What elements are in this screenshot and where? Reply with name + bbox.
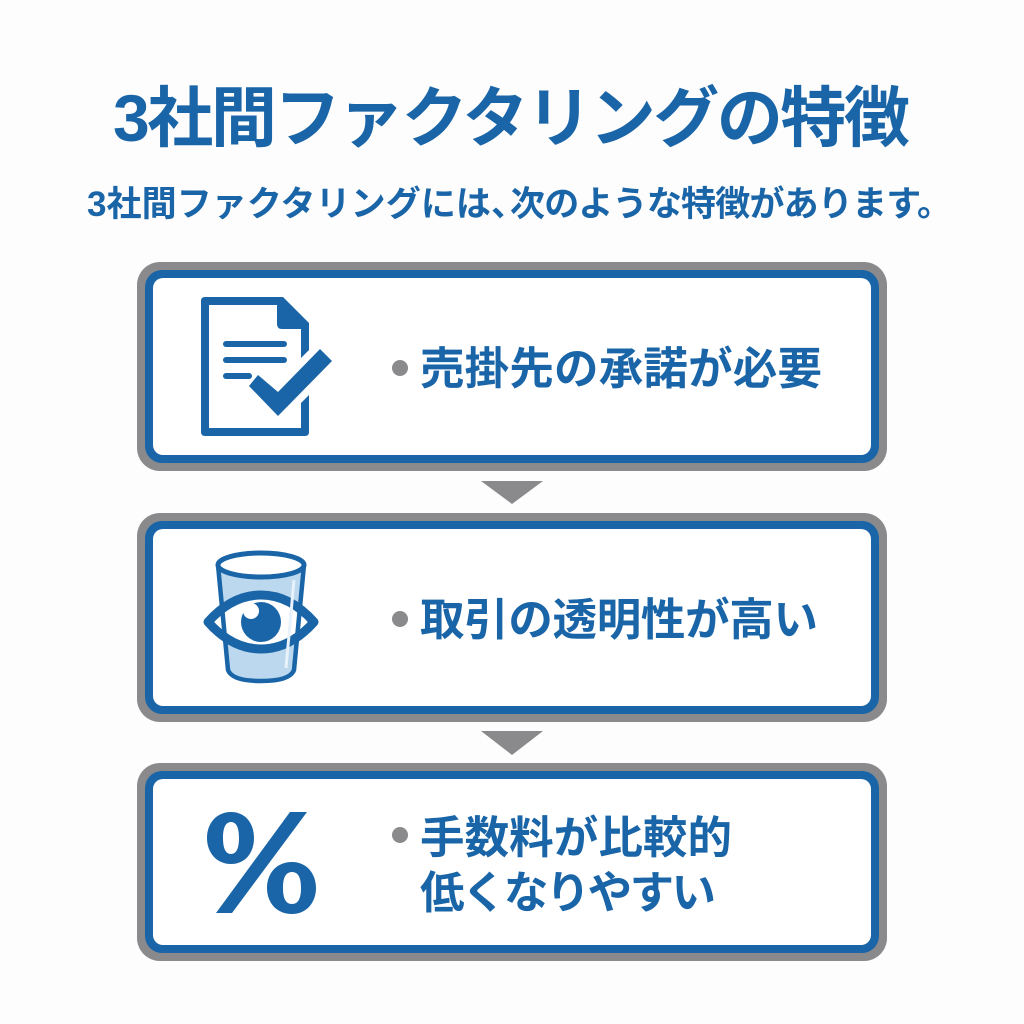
- bullet: [392, 827, 408, 843]
- panel: customer consent: [137, 262, 887, 471]
- arrow: [481, 481, 543, 504]
- text: transparency: 取引の透明性が高い: [420, 596, 818, 645]
- title: 3社間ファクタリングの特徴: [113, 81, 910, 155]
- icon: document with check mark: [201, 297, 332, 436]
- text: fees line 2: 低くなりやすい: [420, 869, 716, 918]
- icon: glass with eye: [208, 553, 314, 681]
- panel: transparency: [137, 513, 887, 722]
- text: customer consent: 売掛先の承諾が必要: [420, 345, 822, 394]
- subtitle: 3社間ファクタリングには、: [87, 185, 526, 224]
- text: fees line 1: 手数料が比較的: [420, 814, 732, 863]
- subtitle: [87, 185, 952, 224]
- subtitle: 次のような特徴があります。: [510, 185, 952, 224]
- bullet: [392, 611, 408, 627]
- panel: fees: [137, 763, 887, 961]
- arrow: [481, 731, 543, 755]
- bullet: [392, 360, 408, 376]
- icon: percent sign: [207, 812, 316, 914]
